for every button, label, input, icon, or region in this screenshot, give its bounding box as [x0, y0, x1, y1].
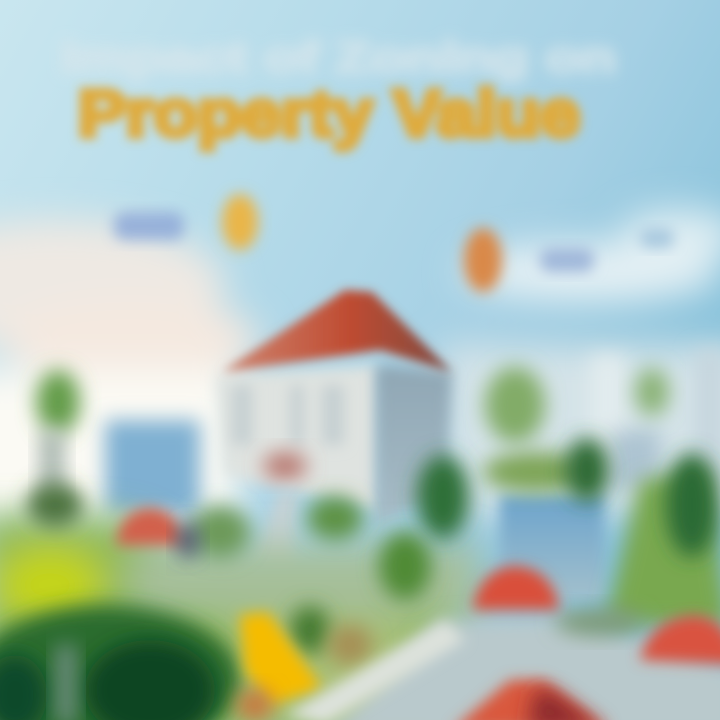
verge: right of road [555, 608, 645, 636]
trees and bushes [0, 367, 720, 720]
tree group: right [605, 470, 720, 625]
house front wall [216, 365, 378, 510]
tree: far right [635, 368, 669, 416]
flower clump [290, 606, 330, 654]
red dome: left lawn [116, 508, 184, 545]
orange flowers [237, 689, 273, 720]
pond [500, 495, 604, 600]
house side wall [376, 365, 452, 525]
icon: yellow balloon [222, 194, 258, 250]
bush: lawn centre [307, 496, 363, 540]
icon: orange balloon [464, 228, 502, 292]
windows [232, 385, 344, 445]
lawn and ground [0, 515, 480, 720]
label: left [114, 212, 184, 240]
background towers [105, 350, 720, 515]
clouds and hazy horizon [0, 209, 720, 520]
bush: lawn right [379, 532, 431, 600]
door path [255, 490, 298, 570]
label: far right [640, 228, 674, 248]
road surface [320, 615, 720, 720]
tree: back right [485, 367, 545, 443]
floating labels and icons [114, 194, 674, 292]
road [285, 608, 720, 720]
road kerb [285, 620, 465, 720]
hedge: right of pond [483, 452, 587, 492]
tree: left [36, 370, 80, 434]
red domes [116, 508, 720, 720]
bush: lawn left [190, 506, 250, 558]
tree: beside house [417, 455, 469, 539]
yellow flower bed [240, 612, 322, 705]
foreground shrub [0, 605, 240, 720]
door canopy [263, 452, 307, 480]
title line 2: Property Value [78, 76, 580, 150]
red dome: right [640, 615, 720, 665]
roof [222, 290, 452, 372]
red dome: bottom [452, 680, 610, 720]
title line 1: Impact of Zoning on [60, 33, 616, 82]
lamp post [56, 645, 76, 720]
label: centre right [540, 248, 594, 272]
red dome: centre [472, 566, 560, 610]
house [216, 290, 452, 570]
